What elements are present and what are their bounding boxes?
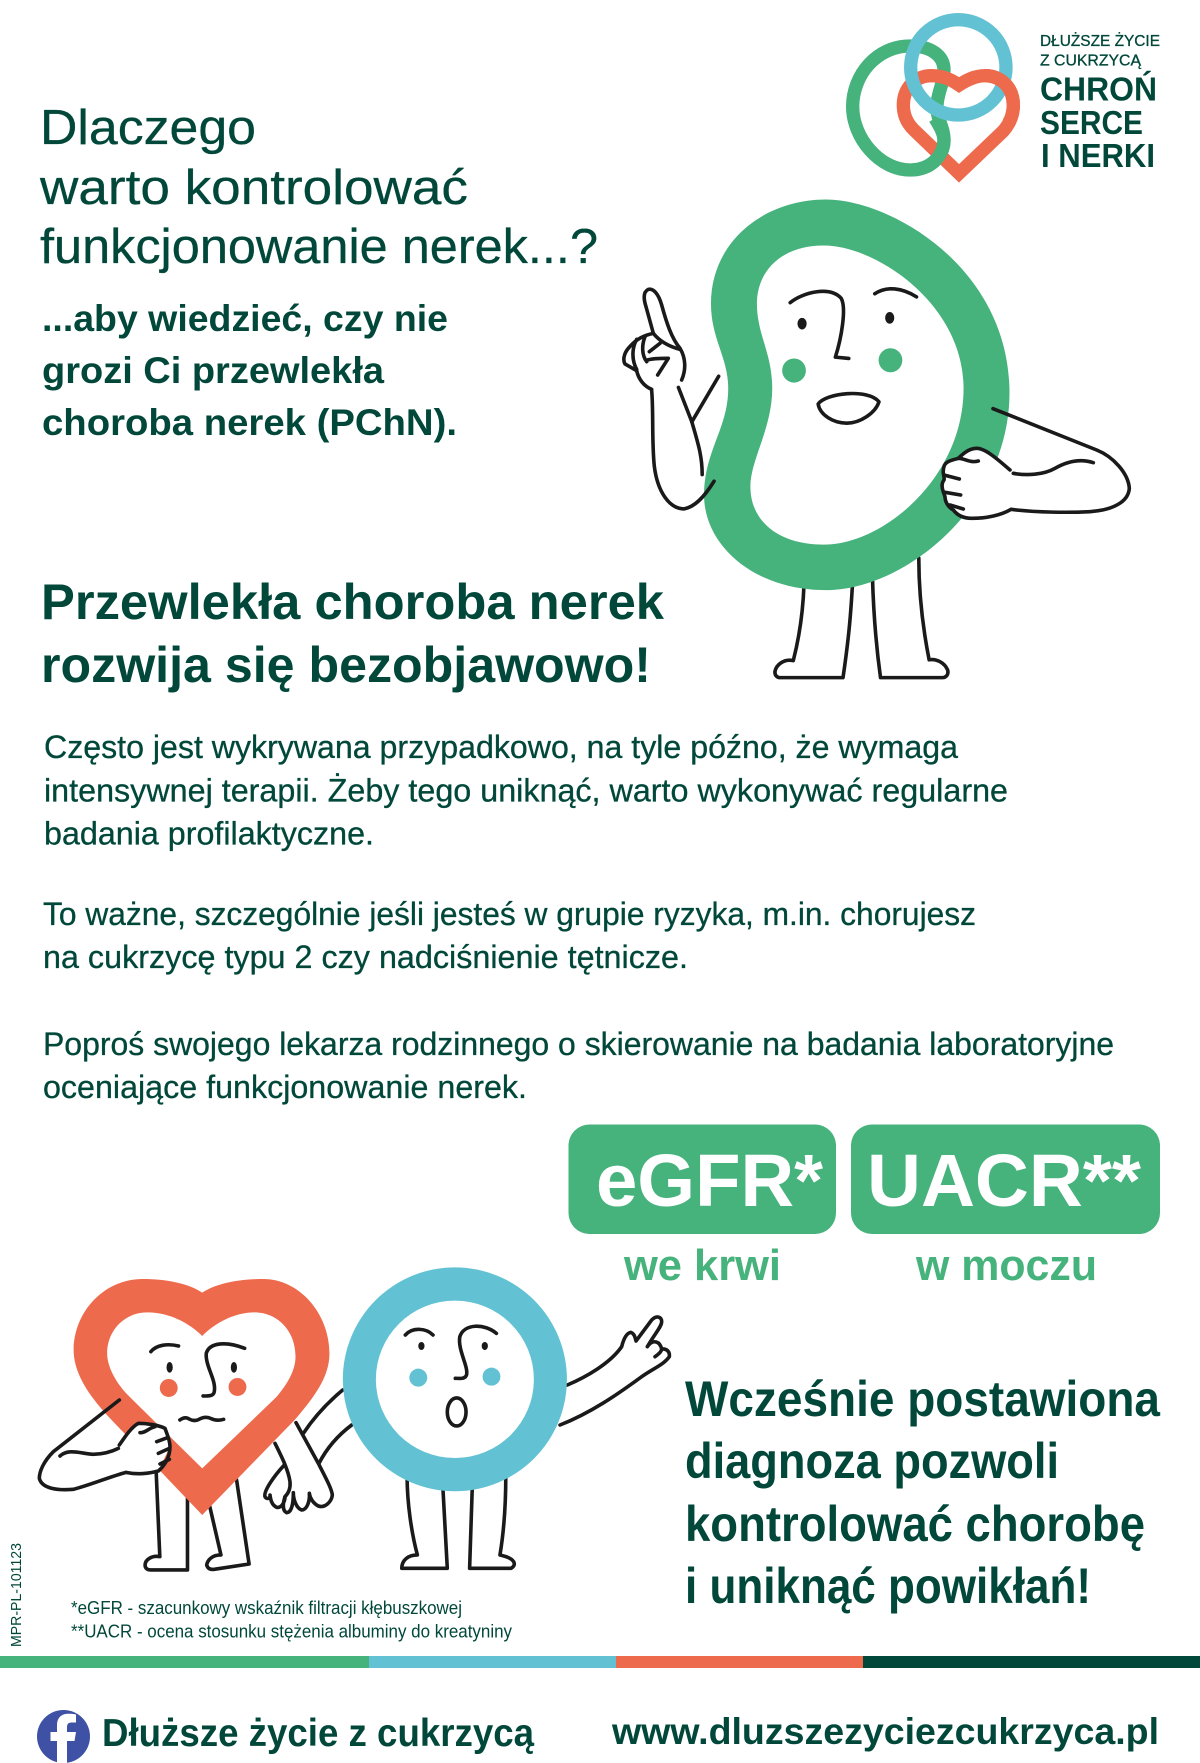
kidney character xyxy=(624,200,1129,678)
badge: UACR xyxy=(851,1124,1160,1234)
title: warto kontrolować xyxy=(39,161,468,215)
heart body xyxy=(74,1279,329,1515)
kidney face xyxy=(790,289,916,423)
badge: eGFR: eGFR* xyxy=(596,1139,823,1222)
message: early diagnosis: Wcześnie postawiona xyxy=(685,1371,1161,1427)
logo xyxy=(853,20,1160,174)
subtitle: ...aby wiedzieć, czy nie xyxy=(42,298,448,339)
circle pointing arm xyxy=(560,1317,669,1425)
kidney raised hand xyxy=(624,289,685,389)
logo mark: interlinked kidney, heart and circle xyxy=(853,20,1013,173)
heart and circle characters xyxy=(39,1267,669,1570)
heart and circle figures xyxy=(74,1267,567,1570)
kidney arm on hip xyxy=(942,409,1129,518)
footer: facebook name: Dłuższe życie z cukrzycą xyxy=(102,1712,534,1755)
circle face xyxy=(405,1326,496,1426)
heading: asymptomatic: Przewlekła choroba nerek xyxy=(41,574,664,630)
message: early diagnosis: kontrolować chorobę xyxy=(685,1496,1145,1552)
footnotes xyxy=(71,1598,512,1642)
subtitle: grozi Ci przewlekła xyxy=(42,350,384,391)
logo wordmark: CHROŃ xyxy=(1040,70,1157,108)
footnotes: **UACR - ocena stosunku stężenia albuminy do kreatyniny xyxy=(71,1622,512,1642)
body paragraph 2: na cukrzycę typu 2 czy nadciśnienie tętnicze. xyxy=(43,939,688,975)
message: early diagnosis: i uniknąć powikłań! xyxy=(685,1558,1091,1614)
body paragraph 1 xyxy=(44,729,1008,852)
logo wordmark: I NERKI xyxy=(1041,137,1155,174)
kidney body group xyxy=(652,200,1009,678)
heart eyes xyxy=(167,1362,237,1373)
body paragraph 2 xyxy=(43,896,976,975)
message: early diagnosis: diagnoza pozwoli xyxy=(685,1433,1059,1489)
circle body xyxy=(343,1267,567,1491)
kidney raised arm xyxy=(652,376,719,509)
colour bar xyxy=(0,1656,1200,1668)
logo wordmark: SERCE xyxy=(1040,104,1143,141)
label: w moczu: w moczu xyxy=(915,1241,1097,1290)
circle eyes xyxy=(418,1342,488,1350)
heart legs xyxy=(145,1473,249,1570)
document code: MPR-PL-101123 xyxy=(9,1543,25,1647)
badge: eGFR xyxy=(568,1124,836,1234)
kidney cheeks xyxy=(782,348,902,383)
heart arm with fist xyxy=(39,1400,170,1490)
body paragraph 2: To ważne, szczególnie jeśli jesteś w grupie ryzyka, m.in. chorujesz xyxy=(43,896,976,932)
logo wordmark: Z CUKRZYCĄ xyxy=(1040,52,1141,70)
kidney shape xyxy=(704,200,1009,590)
circle legs xyxy=(402,1477,514,1568)
body paragraph 3: Poproś swojego lekarza rodzinnego o skierowanie na badania laboratoryjne xyxy=(43,1026,1114,1062)
holding hands xyxy=(265,1390,352,1513)
logo wordmark xyxy=(1040,31,1160,174)
title: funkcjonowanie nerek...? xyxy=(40,220,598,274)
footer: website: www.dluzszezyciezcukrzyca.pl xyxy=(611,1711,1159,1752)
title: Dlaczego xyxy=(40,101,256,155)
body paragraph 1: badania profilaktyczne. xyxy=(44,816,374,852)
label: we krwi: we krwi xyxy=(623,1241,781,1290)
icon: facebook xyxy=(37,1710,90,1763)
badge: UACR: UACR** xyxy=(867,1139,1141,1222)
kidney eyes xyxy=(797,312,894,329)
circle cheeks xyxy=(409,1368,500,1387)
kidney legs xyxy=(775,558,948,678)
subtitle xyxy=(42,298,457,443)
body paragraph 3: oceniające funkcjonowanie nerek. xyxy=(43,1069,527,1105)
logo wordmark: DŁUŻSZE ŻYCIE xyxy=(1040,31,1160,50)
body paragraph 1: Często jest wykrywana przypadkowo, na tyle późno, że wymaga xyxy=(44,729,958,765)
body paragraph 3 xyxy=(43,1026,1114,1105)
message: early diagnosis xyxy=(685,1371,1161,1614)
subtitle: choroba nerek (PChN). xyxy=(42,402,457,443)
heading: asymptomatic: rozwija się bezobjawowo! xyxy=(41,637,651,693)
heart cheeks xyxy=(160,1378,246,1397)
heading: asymptomatic xyxy=(41,574,664,693)
heart face xyxy=(151,1344,245,1421)
body paragraph 1: intensywnej terapii. Żeby tego uniknąć, warto wykonywać regularne xyxy=(44,772,1008,808)
title xyxy=(39,101,598,274)
footnotes: *eGFR - szacunkowy wskaźnik filtracji kłębuszkowej xyxy=(71,1598,462,1618)
